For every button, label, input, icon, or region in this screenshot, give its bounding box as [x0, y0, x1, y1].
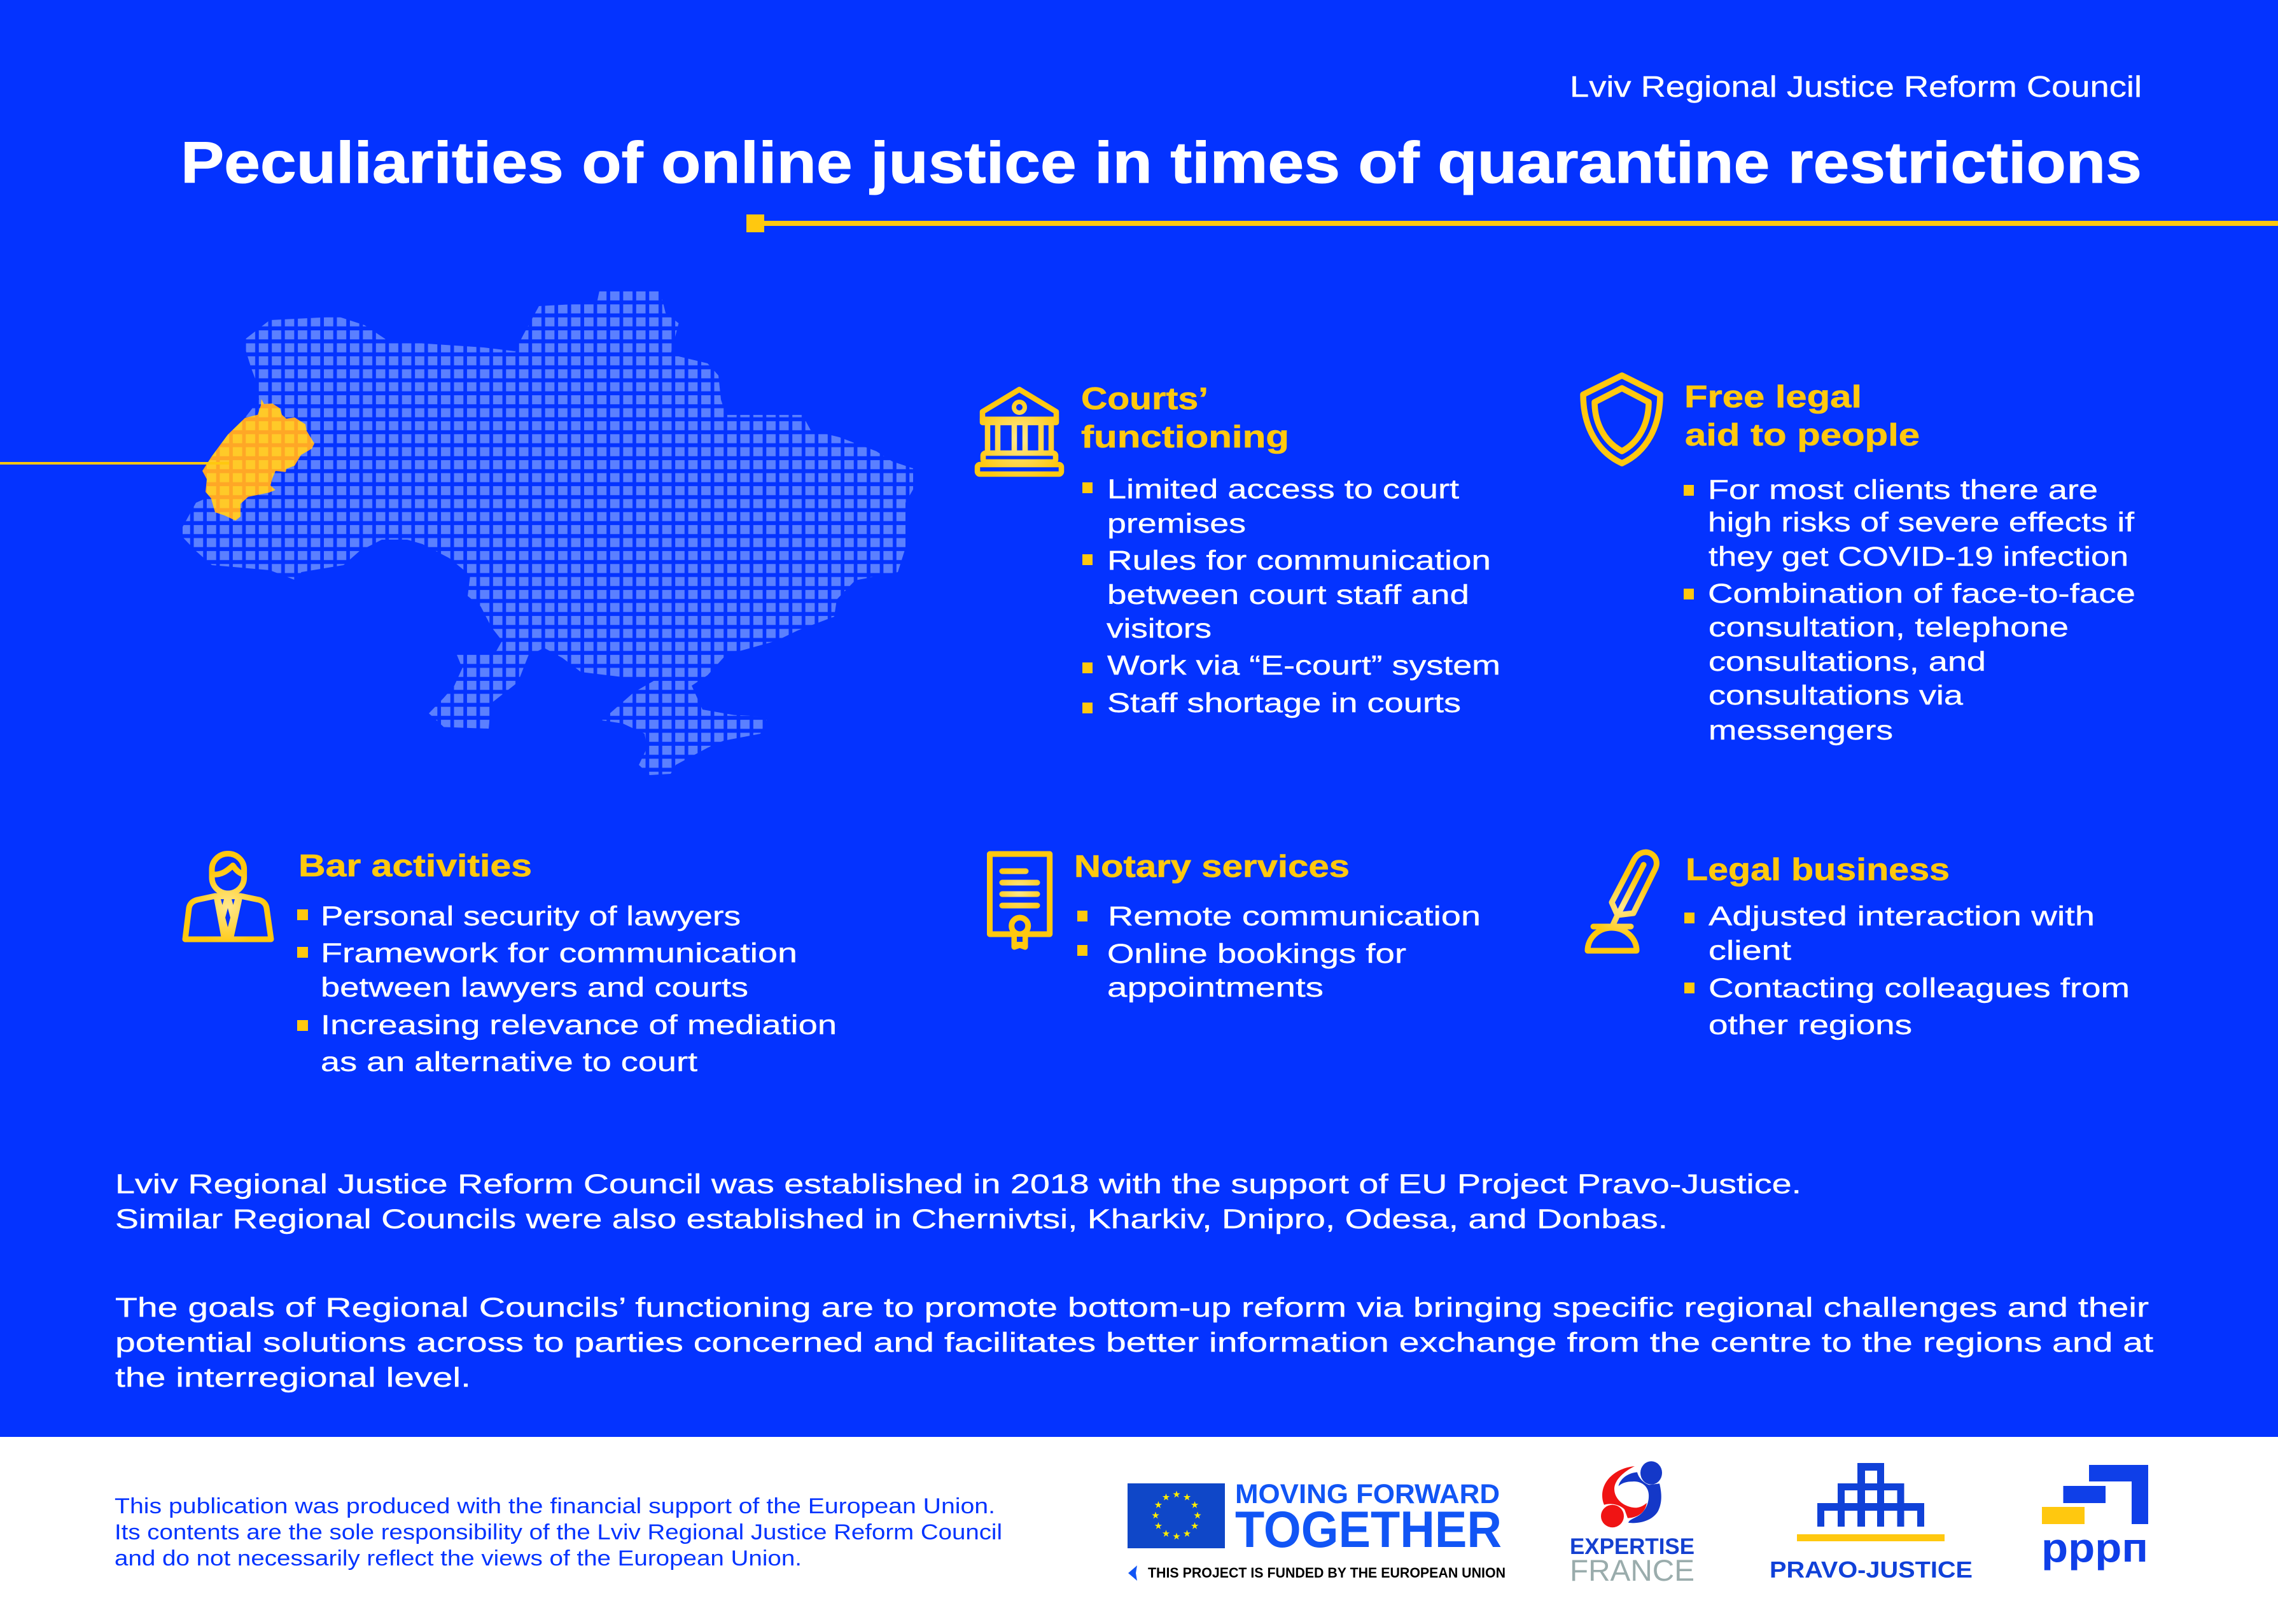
panel: notary services	[990, 850, 1481, 1003]
logo: Pravo-Justice	[1770, 1463, 1973, 1583]
bullet list: notary services: Online bookings for	[1107, 939, 1406, 969]
bullet list: courts' functioning: between court staff and	[1107, 580, 1469, 610]
heading: courts' functioning	[1081, 382, 1289, 454]
footer disclaimer: Its contents are the sole responsibility of the Lviv Regional Justice Reform Council	[115, 1520, 1002, 1544]
heading: notary services: Notary services	[1074, 850, 1350, 884]
bullet list: free legal aid: Combination of face-to-face	[1708, 578, 2135, 609]
title: Peculiarities of online justice in times of quarantine restrictions	[181, 130, 2142, 195]
heading: legal business: Legal business	[1686, 853, 1950, 887]
text block: about the Regional Councils: Similar Regional Councils were also established in Chernivtsi, Kharkiv, Dnipro, Odesa, and Donbas.	[115, 1204, 1668, 1235]
icon: lawyer	[185, 854, 271, 939]
panel: courts' functioning	[977, 382, 1500, 718]
bullet list: free legal aid: consultations via	[1708, 680, 1963, 711]
logo: Expertise France: EXPERTISE	[1570, 1534, 1695, 1559]
heading: free legal aid: Free legal	[1684, 380, 1862, 414]
icon: courthouse	[977, 389, 1061, 474]
bullet list: courts' functioning: Work via “E-court” system	[1107, 650, 1500, 681]
logo: EU moving forward together: THIS PROJECT IS FUNDED BY THE EUROPEAN UNION	[1148, 1565, 1506, 1581]
logo: RRRP	[2041, 1465, 2148, 1571]
emblem: red and blue figures	[1601, 1461, 1662, 1527]
logo: Pravo-Justice: PRAVO-JUSTICE	[1770, 1557, 1973, 1583]
bullet list: bar activities: Framework for communication	[321, 938, 797, 969]
bullet list: free legal aid: For most clients there are	[1708, 475, 2098, 505]
heading: free legal aid: aid to people	[1685, 418, 1920, 452]
map: pointer line to Lviv region	[0, 462, 229, 465]
heading: courts' functioning: functioning	[1081, 420, 1289, 454]
bullet list: courts' functioning: Rules for communication	[1107, 545, 1491, 576]
heading: bar activities: Bar activities	[298, 849, 532, 883]
text block: about the Regional Councils: Lviv Regional Justice Reform Council was established in 2018 with the support of EU Project Pravo-Justice.	[115, 1169, 1801, 1200]
map: Lviv region highlight	[202, 399, 314, 521]
bullet list: legal business: other regions	[1708, 1010, 1912, 1040]
bullet list: courts' functioning: visitors	[1107, 613, 1212, 644]
logo: EU moving forward together: MOVING FORWARD	[1235, 1479, 1500, 1509]
bullet list: courts' functioning: Staff shortage in courts	[1107, 688, 1461, 718]
footer disclaimer	[115, 1494, 1002, 1571]
heading: free legal aid	[1684, 380, 1920, 452]
footer disclaimer: and do not necessarily reflect the views of the European Union.	[115, 1546, 802, 1571]
text block: goals of Regional Councils: the interregional level.	[115, 1362, 471, 1393]
panel: bar activities	[185, 849, 837, 1077]
logo: EU moving forward together	[1128, 1479, 1506, 1581]
bullet list: free legal aid: they get COVID-19 infection	[1708, 542, 2128, 572]
bullet list: courts' functioning: Limited access to court	[1107, 474, 1459, 505]
EU flag	[1128, 1483, 1225, 1548]
bullet list: bar activities	[297, 901, 837, 1077]
icon: quill and inkwell	[1588, 852, 1656, 951]
bullet list: bar activities: Personal security of lawyers	[321, 901, 741, 932]
logo: Expertise France: FRANCE	[1570, 1553, 1695, 1587]
text block: goals of Regional Councils: The goals of Regional Councils’ functioning are to promote bottom-up reform via bringing specific regional challenges and their	[115, 1292, 2149, 1323]
bullet list: bar activities: as an alternative to court	[321, 1047, 697, 1077]
title rule with square marker	[746, 214, 2278, 232]
bullet list: free legal aid: messengers	[1708, 715, 1893, 746]
map: Ukraine dotted grid	[183, 291, 913, 775]
bullet list: bar activities: between lawyers and courts	[321, 972, 748, 1003]
bullet list: courts' functioning: premises	[1107, 508, 1246, 539]
bullet list: legal business	[1684, 901, 2130, 1040]
icon: shield	[1583, 375, 1660, 463]
bullet list: free legal aid: consultations, and	[1708, 647, 1986, 677]
text block: goals of Regional Councils	[115, 1292, 2153, 1393]
bullet list: legal business: Contacting colleagues from	[1708, 973, 2130, 1004]
header organisation name: Lviv Regional Justice Reform Council	[1570, 70, 2142, 103]
heading: courts' functioning: Courts’	[1081, 382, 1208, 416]
logo: RRRP: рррп	[2041, 1525, 2148, 1571]
text block: goals of Regional Councils: potential solutions across to parties concerned and facilitates better information exchange from the centre to the regions and at	[115, 1327, 2153, 1358]
bullet list: free legal aid: consultation, telephone	[1708, 612, 2069, 643]
bullet list: courts' functioning	[1082, 474, 1500, 718]
bullet list: free legal aid	[1684, 475, 2135, 746]
logo: EU moving forward together: TOGETHER	[1235, 1501, 1502, 1558]
bullet list: notary services	[1077, 901, 1481, 1003]
panel: free legal aid to people	[1583, 375, 2135, 746]
panel: legal business	[1588, 852, 2130, 1040]
map of Ukraine with Lviv region highlighted	[0, 291, 913, 775]
bullet list: free legal aid: high risks of severe effects if	[1708, 507, 2135, 538]
bullet list: bar activities: Increasing relevance of mediation	[321, 1010, 837, 1040]
footer disclaimer: This publication was produced with the financial support of the European Union.	[115, 1494, 995, 1518]
bullet list: notary services: Remote communication	[1108, 901, 1481, 932]
bullet list: legal business: client	[1708, 935, 1791, 966]
icon: notarised document	[990, 854, 1050, 947]
bullet list: notary services: appointments	[1107, 972, 1324, 1003]
text block: about the Regional Councils	[115, 1169, 1801, 1235]
logo: Expertise France	[1570, 1461, 1695, 1587]
bullet list: legal business: Adjusted interaction with	[1708, 901, 2095, 932]
